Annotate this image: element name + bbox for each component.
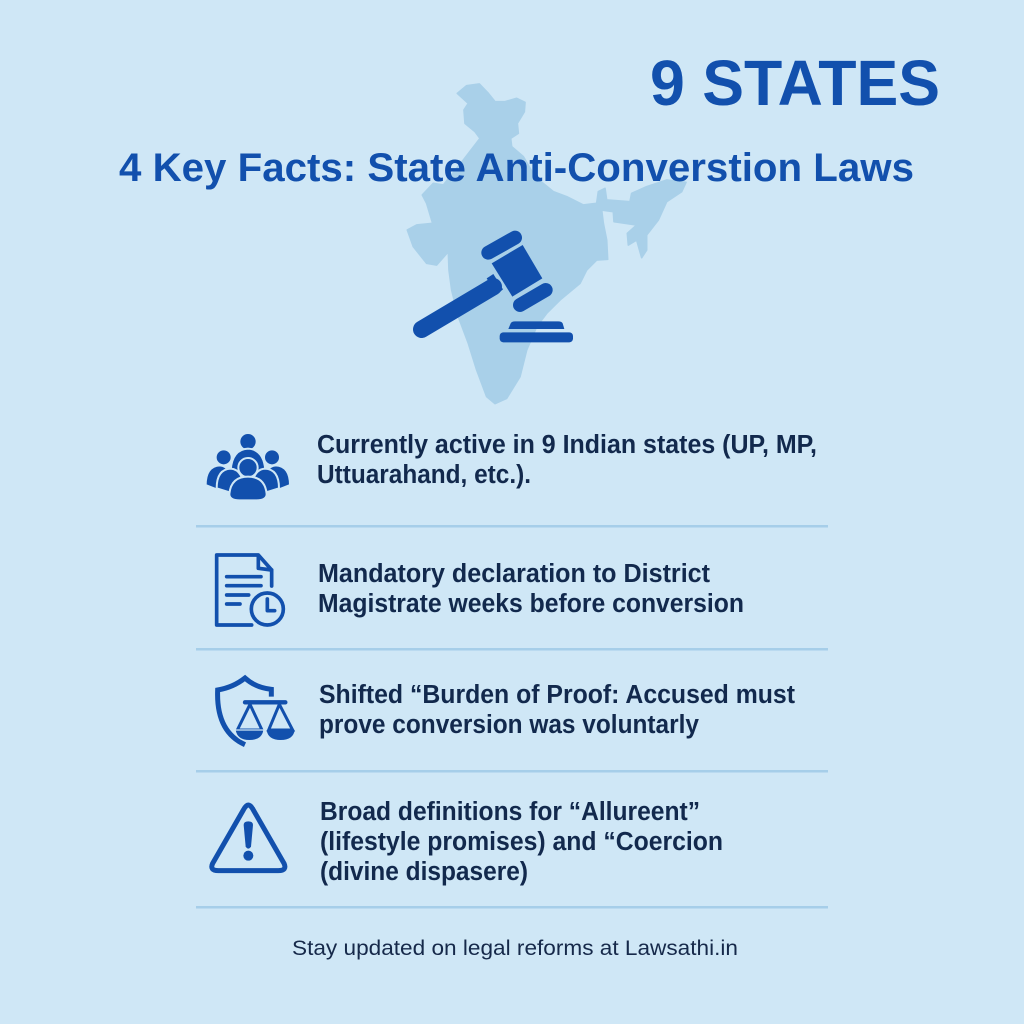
fact row 4	[212, 798, 723, 886]
map of India	[407, 84, 686, 404]
footer: Stay updated on legal reforms at Lawsathi.in	[292, 937, 738, 960]
fact 1 text: Uttuarahand, etc.).	[317, 461, 531, 489]
fact 4 text	[320, 798, 723, 886]
fact 2 text	[318, 560, 744, 618]
fact 3 text: prove conversion was voluntarly	[319, 711, 700, 739]
icon: gavel	[422, 238, 573, 342]
icon: document with clock	[217, 555, 283, 625]
fact row 1	[206, 431, 817, 500]
fact 3 text: Shifted “Burden of Proof: Accused must	[319, 681, 795, 709]
fact row 3	[218, 678, 795, 745]
icon: shield with scales	[218, 678, 295, 745]
fact 4 text: (divine dispasere)	[320, 858, 528, 886]
fact 1 text: Currently active in 9 Indian states (UP, MP,	[317, 431, 817, 459]
fact 4 text: Broad definitions for “Allureent”	[320, 798, 700, 826]
big number heading: 9 STATES	[650, 47, 940, 119]
title: 4 Key Facts: State Anti-Converstion Laws	[119, 146, 914, 190]
fact row 2	[217, 555, 744, 625]
fact 2 text: Magistrate weeks before conversion	[318, 590, 744, 618]
fact 4 text: (lifestyle promises) and “Coercion	[320, 828, 723, 856]
fact 2 text: Mandatory declaration to District	[318, 560, 710, 588]
fact 3 text	[319, 681, 795, 739]
icon: warning triangle	[212, 805, 285, 871]
icon: group of people	[206, 433, 290, 500]
fact 1 text	[317, 431, 817, 489]
